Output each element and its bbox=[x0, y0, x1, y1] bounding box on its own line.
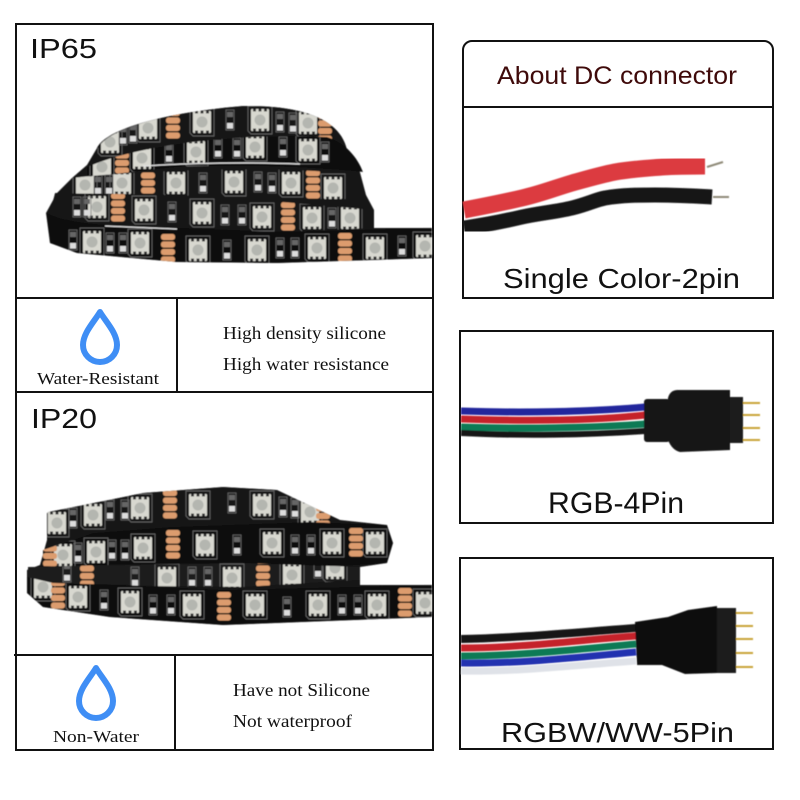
photo: IP20 LED strip coil bbox=[27, 487, 437, 625]
panel frame bbox=[463, 41, 773, 298]
heading: IP65: IP65 bbox=[30, 33, 97, 64]
label: Water-Resistant: Water-Resistant bbox=[37, 369, 159, 388]
panel frame bbox=[460, 558, 773, 749]
text block: IP20 features: Have not Silicone bbox=[233, 680, 370, 700]
icon: water drop, water-resistant bbox=[83, 312, 117, 362]
text block: IP65 features: High density silicone bbox=[223, 323, 386, 343]
text block: IP65 features: High water resistance bbox=[223, 354, 389, 374]
photo: IP65 LED strip coil bbox=[46, 106, 437, 264]
label: Single Color-2pin: Single Color-2pin bbox=[503, 263, 740, 294]
panel: IP ratings table bbox=[14, 24, 437, 750]
label: RGB-4Pin: RGB-4Pin bbox=[548, 487, 684, 520]
text block: IP20 features: Not waterproof bbox=[233, 711, 352, 731]
panel frame bbox=[460, 331, 773, 523]
icon: water drop, non-water bbox=[79, 668, 113, 718]
panel: RGBW/WW 5-pin connector bbox=[460, 558, 773, 749]
label: Non-Water: Non-Water bbox=[53, 727, 139, 746]
heading: IP20: IP20 bbox=[31, 403, 97, 434]
text block: IP20 features bbox=[233, 680, 370, 731]
photo: red and black wires bbox=[464, 162, 729, 228]
table frame bbox=[14, 24, 433, 750]
photo: RGBW wires and connector bbox=[461, 606, 753, 674]
panel: single color 2-pin connector bbox=[463, 41, 773, 298]
photo: RGB wires and connector bbox=[461, 390, 760, 452]
label: RGBW/WW-5Pin: RGBW/WW-5Pin bbox=[501, 717, 734, 748]
text block: IP65 features bbox=[223, 323, 389, 374]
heading: About DC connector: About DC connector bbox=[497, 62, 737, 90]
panel: RGB 4-pin connector bbox=[460, 331, 773, 523]
